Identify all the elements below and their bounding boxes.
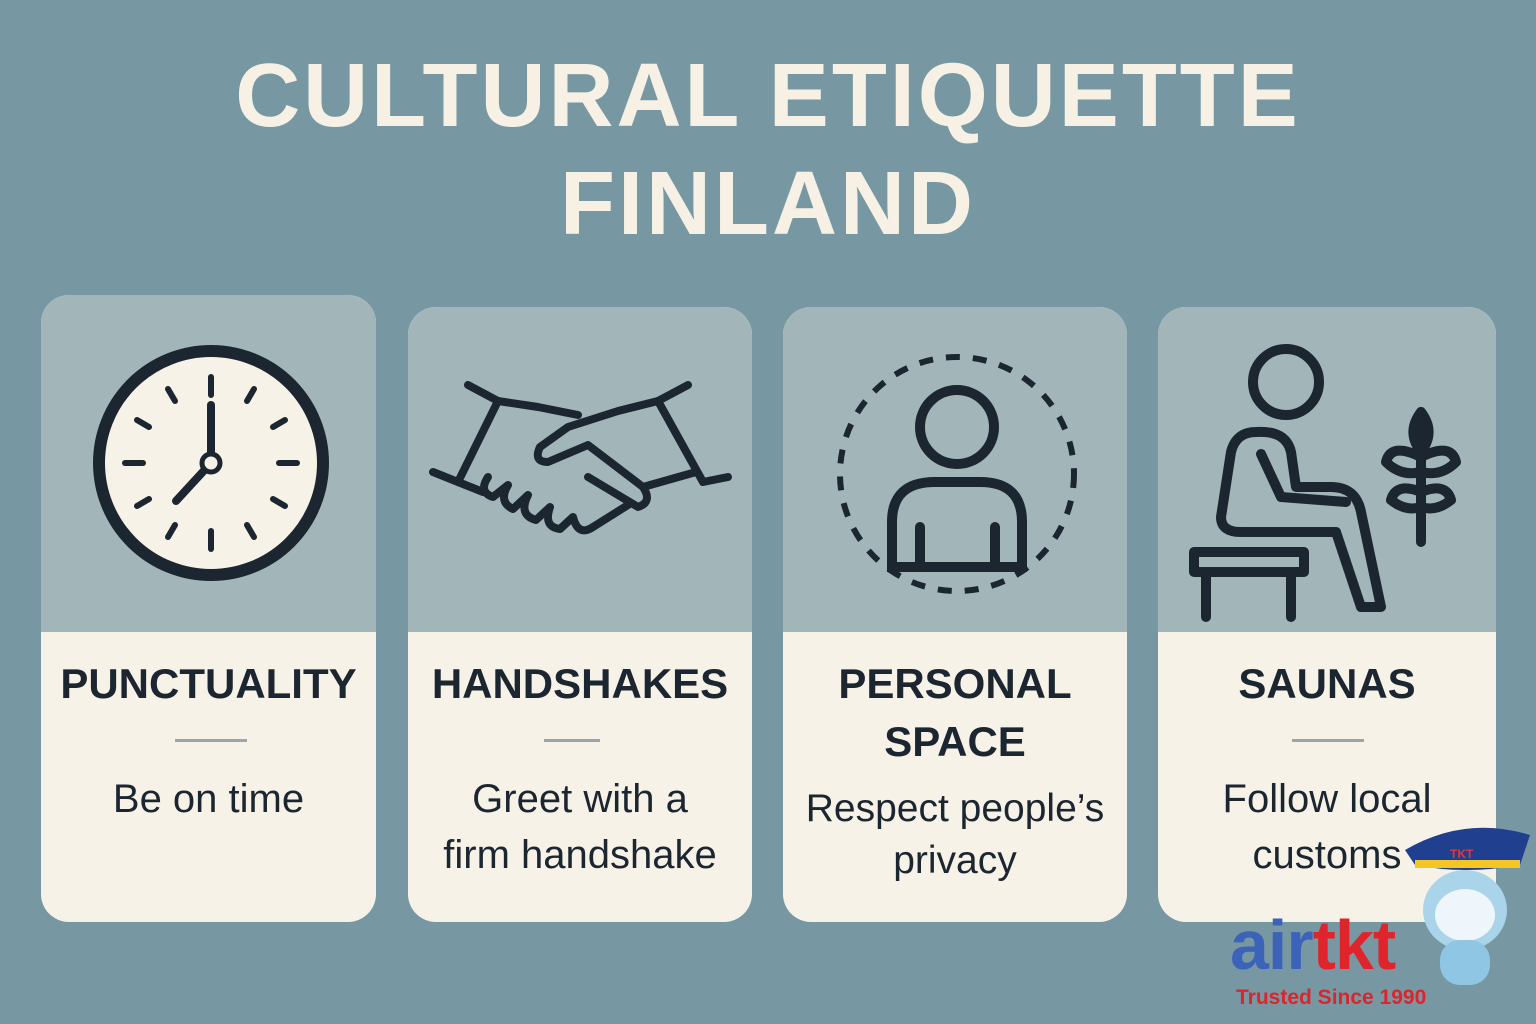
panel: personal space (783, 307, 1127, 922)
text (443, 777, 717, 877)
heading: PERSONAL (838, 660, 1072, 707)
text: privacy (893, 839, 1017, 882)
text: Be on time (113, 777, 304, 821)
text: Respect people’s (806, 787, 1104, 830)
icon: handshake (429, 381, 732, 534)
title (235, 46, 1301, 254)
panel: punctuality (41, 295, 376, 922)
icon: mascot (1405, 828, 1530, 985)
logo: airtkt mascot (1230, 828, 1530, 1009)
heading: HANDSHAKES (432, 660, 728, 707)
text: Follow local (1223, 777, 1431, 821)
logo: airtkt mascot: Trusted Since 1990 (1236, 986, 1426, 1009)
heading (838, 660, 1072, 765)
text (806, 787, 1104, 882)
icon: person on bench with branch (1189, 344, 1461, 622)
text: customs (1253, 833, 1401, 877)
heading: SPACE (884, 718, 1026, 765)
panel: handshakes (408, 307, 752, 922)
icon: mascot: TKT (1450, 847, 1474, 861)
title: FINLAND (560, 154, 976, 254)
text: Greet with a (472, 777, 688, 821)
text: airtkt: airtkt (1230, 906, 1395, 984)
title: CULTURAL ETIQUETTE (235, 46, 1301, 146)
icon: clock (93, 345, 329, 581)
icon: person in dashed circle (837, 354, 1077, 594)
text (1223, 777, 1431, 877)
heading: PUNCTUALITY (60, 660, 357, 707)
heading: SAUNAS (1238, 660, 1416, 707)
panel: saunas (1158, 307, 1496, 922)
text: firm handshake (443, 833, 717, 877)
